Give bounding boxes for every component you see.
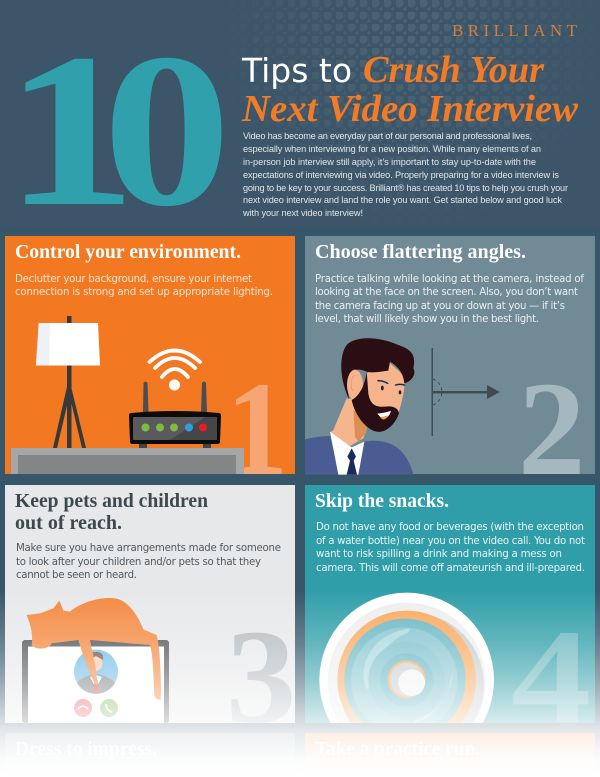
brand logo: Brilliant: BRILLIANT (452, 21, 578, 40)
body text (16, 543, 281, 581)
icon: table (11, 448, 244, 474)
intro paragraph: especially when interviewing for a new position. While many elements of an (243, 144, 541, 154)
panel 1: control your environment (5, 236, 295, 474)
body text: Make sure you have arrangements made for someone (16, 543, 281, 554)
body text: to look after your children and/or pets so that they (16, 557, 261, 568)
bottom white fade (0, 590, 600, 777)
body text: connection is strong and set up appropriate lighting. (15, 287, 273, 298)
heading: Choose flattering angles. (315, 242, 526, 263)
body text: of a water bottle) near you on the video call. You do not (316, 536, 585, 547)
body text: level, that will likely show you in the best light. (315, 314, 539, 325)
big number 10: 0 (102, 8, 231, 252)
intro paragraph: in-person job interview still apply, it’s important to stay up-to-date with the (243, 157, 536, 167)
big number 10: 1 (4, 8, 137, 252)
body text: camera. This will come off amateurish and ill-prepared. (316, 563, 585, 574)
number 4: 4 (511, 603, 591, 752)
panel 4: skip the snacks (305, 485, 595, 723)
icon: wifi router (129, 350, 221, 448)
heading: Control your environment. (15, 242, 241, 263)
illustration: man facing camera (305, 338, 414, 475)
intro paragraph: expectations of interviewing via video. Properly preparing for a video interview is (243, 170, 559, 180)
illustration: laptop video call (22, 640, 169, 723)
number 1: 1 (226, 354, 288, 504)
title (241, 49, 579, 130)
heading: out of reach. (15, 513, 122, 534)
body text: Declutter your background, ensure your internet (15, 274, 252, 285)
body text (315, 274, 584, 325)
title: Next Video Interview (241, 88, 579, 130)
intro paragraph: with your next video interview! (242, 208, 363, 218)
panel 2: choose flattering angles (305, 236, 595, 504)
body text: want to risk spilling a drink and making a mess on (316, 549, 562, 560)
diagram: camera level arrow (432, 348, 500, 436)
header band (254, 0, 566, 196)
body text (15, 274, 273, 298)
body text: Do not have any food or beverages (with the exception (316, 522, 584, 533)
icon: floor lamp (36, 316, 100, 448)
body text: looking at the face on the screen. Also, you don’t want (315, 287, 578, 298)
heading: Skip the snacks. (315, 491, 449, 512)
intro paragraph: next video interview and land the role you want. Get started below and good luck (243, 195, 562, 205)
body text (316, 522, 585, 574)
heading: Dress to impress. (15, 739, 157, 760)
panel 5: dress to impress (5, 733, 295, 777)
body text: Practice talking while looking at the camera, instead of (315, 274, 584, 285)
heading: Take a practice run. (315, 739, 480, 760)
illustration: orange cat (27, 598, 161, 700)
body text: the camera facing up at you or down at you — if it’s (315, 301, 565, 312)
intro paragraph: Video has become an everyday part of our personal and professional lives, (243, 131, 532, 141)
number 2: 2 (518, 355, 586, 504)
intro paragraph (242, 131, 568, 218)
title: Tips to (241, 51, 352, 90)
intro paragraph: going to be key to your success. Brilliant® has created 10 tips to help you crush your (243, 183, 568, 193)
title: Crush Your (363, 49, 545, 91)
illustration: donut on plate (319, 592, 494, 723)
heading (15, 491, 208, 534)
heading: Keep pets and children (15, 491, 208, 512)
number 3: 3 (226, 601, 296, 751)
panel 6: take a practice run (305, 733, 595, 777)
body text: cannot be seen or heard. (16, 570, 137, 581)
panel 3: keep pets and children out of reach (5, 485, 295, 723)
big number 10 (4, 8, 231, 252)
